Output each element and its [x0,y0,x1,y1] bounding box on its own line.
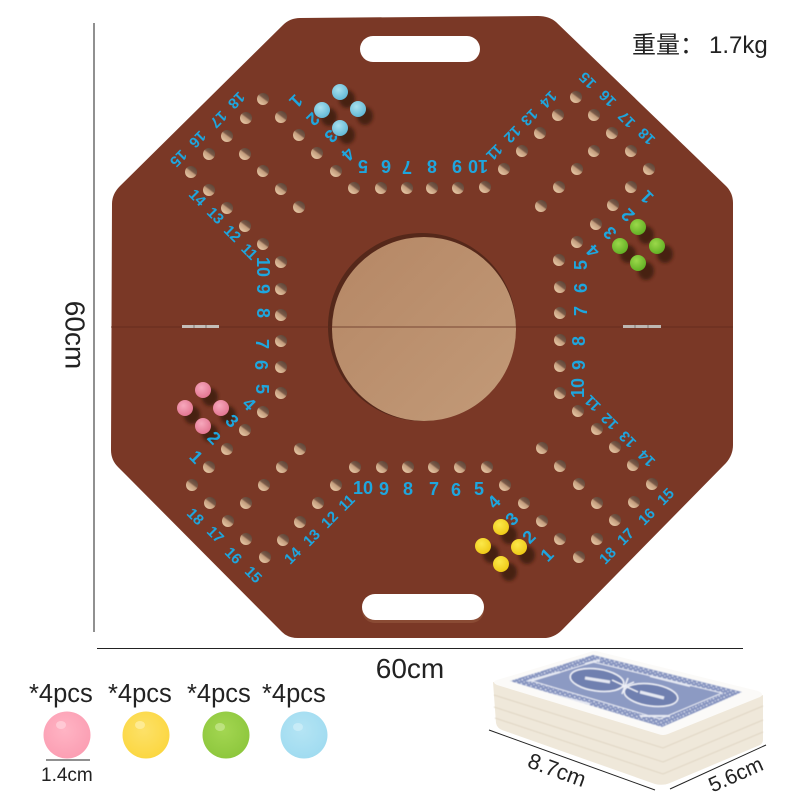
weight label: 重量：1.7kg [632,32,768,59]
height dimension: 60cm [60,301,90,369]
board body [111,16,733,638]
blue ball: *4pcs [262,680,326,708]
numbers: right track: 17 [614,525,638,549]
numbers: left track: 17 [206,107,230,131]
numbers: left track: 1 [185,446,207,468]
numbers: left track: 5 [252,384,272,394]
numbers: bottom track: 5 [474,479,484,499]
numbers: left track: 10 [253,257,273,277]
numbers: top track: 8 [427,156,437,176]
ball legend [29,680,328,786]
card length dimension [489,730,655,792]
marble shadows [184,90,673,581]
numbers: top track: 10 [468,156,488,176]
numbers: left track: 13 [203,204,227,228]
top handle [360,36,480,62]
numbers: top track: 4 [337,143,359,165]
numbers: right track: 15 [654,485,678,509]
numbers: bottom track [183,478,558,587]
numbers: right track: 13 [616,427,640,451]
bottom handle [362,594,484,623]
numbers: bottom track: 14 [281,544,305,568]
numbers: left track: 4 [238,393,260,415]
numbers: right track: 4 [582,240,604,262]
numbers: left track [166,88,273,468]
numbers: right track: 6 [571,283,591,293]
numbers: top track: 2 [302,108,324,130]
numbers: top track: 17 [615,107,639,131]
card length dimension: 8.7cm [525,748,589,792]
numbers: right track: 9 [569,360,589,370]
numbers: left track: 12 [220,222,244,246]
numbers: right track: 14 [635,446,659,470]
numbers: bottom track: 2 [518,526,540,548]
numbers: top track: 1 [285,90,307,112]
green ball [187,680,251,758]
centre circle [328,233,516,421]
numbers: top track: 9 [452,156,462,176]
peg holes [185,91,658,563]
numbers: left track: 6 [251,360,271,370]
numbers: right track: 18 [596,544,620,568]
card top face [494,651,762,735]
numbers: bottom track: 12 [318,508,342,532]
numbers: left track: 16 [185,127,209,151]
numbers: left track: 8 [253,308,273,318]
green ball: *4pcs [187,680,251,708]
numbers: bottom track: 3 [501,508,523,530]
card width dimension: 5.6cm [705,753,767,797]
numbers: top track [285,68,659,177]
game board [111,16,733,638]
fold seam [111,326,733,328]
numbers: bottom track: 1 [536,544,558,566]
numbers: left track: 14 [185,186,209,210]
numbers: left track: 18 [224,88,248,112]
numbers: left track: 2 [203,427,225,449]
numbers: bottom track: 9 [379,479,389,499]
numbers: left track: 15 [166,146,190,170]
ball size: 1.4cm [41,765,93,786]
numbers: right track: 3 [599,222,621,244]
numbers: bottom track: 13 [300,526,324,550]
numbers: bottom track: 18 [183,505,207,529]
numbers: top track: 14 [536,87,560,111]
numbers: bottom track: 16 [221,544,245,568]
numbers: right track: 16 [635,505,659,529]
green marbles [612,219,665,271]
numbers: bottom track: 7 [429,479,439,499]
pink ball [29,680,93,758]
blue ball [262,680,328,758]
numbers: right track: 8 [569,336,589,346]
numbers: right track: 11 [581,391,605,415]
numbers: top track: 12 [500,122,524,146]
card back pattern [510,655,742,727]
numbers: left track: 9 [253,284,273,294]
numbers: right track: 2 [617,204,639,226]
numbers: right track [568,186,678,568]
yellow ball: *4pcs [108,680,172,708]
yellow marbles [475,519,527,572]
numbers: top track: 6 [381,156,391,176]
numbers: top track: 13 [517,105,541,129]
deck sides [493,682,763,785]
pink ball: *4pcs [29,680,93,708]
numbers: bottom track: 6 [451,480,461,500]
left hinge [182,325,219,328]
numbers: top track: 18 [635,124,659,148]
playing card deck [493,651,763,785]
blue marbles [314,84,366,136]
numbers: right track: 12 [598,409,622,433]
pink marbles [177,382,229,434]
numbers: right track: 7 [571,306,591,316]
numbers: top track: 11 [482,140,506,164]
width dimension: 60cm [376,653,444,684]
numbers: right track: 10 [568,378,588,398]
numbers: bottom track: 17 [203,523,227,547]
yellow ball [108,680,172,758]
numbers: left track: 7 [252,339,272,349]
numbers: bottom track: 8 [403,479,413,499]
numbers: top track: 16 [596,86,620,110]
numbers: right track: 5 [571,260,591,270]
numbers: left track: 11 [237,240,261,264]
numbers: bottom track: 4 [483,491,505,513]
numbers: right track: 1 [636,186,658,208]
numbers: bottom track: 15 [241,563,265,587]
numbers: bottom track: 10 [353,478,373,498]
numbers: left track: 3 [221,410,243,432]
numbers: top track: 15 [576,68,600,92]
numbers: bottom track: 11 [335,491,359,515]
numbers: top track: 3 [320,125,342,147]
card width dimension [670,745,767,797]
numbers: top track: 5 [358,156,368,176]
right hinge [623,325,661,328]
numbers: top track: 7 [402,157,412,177]
